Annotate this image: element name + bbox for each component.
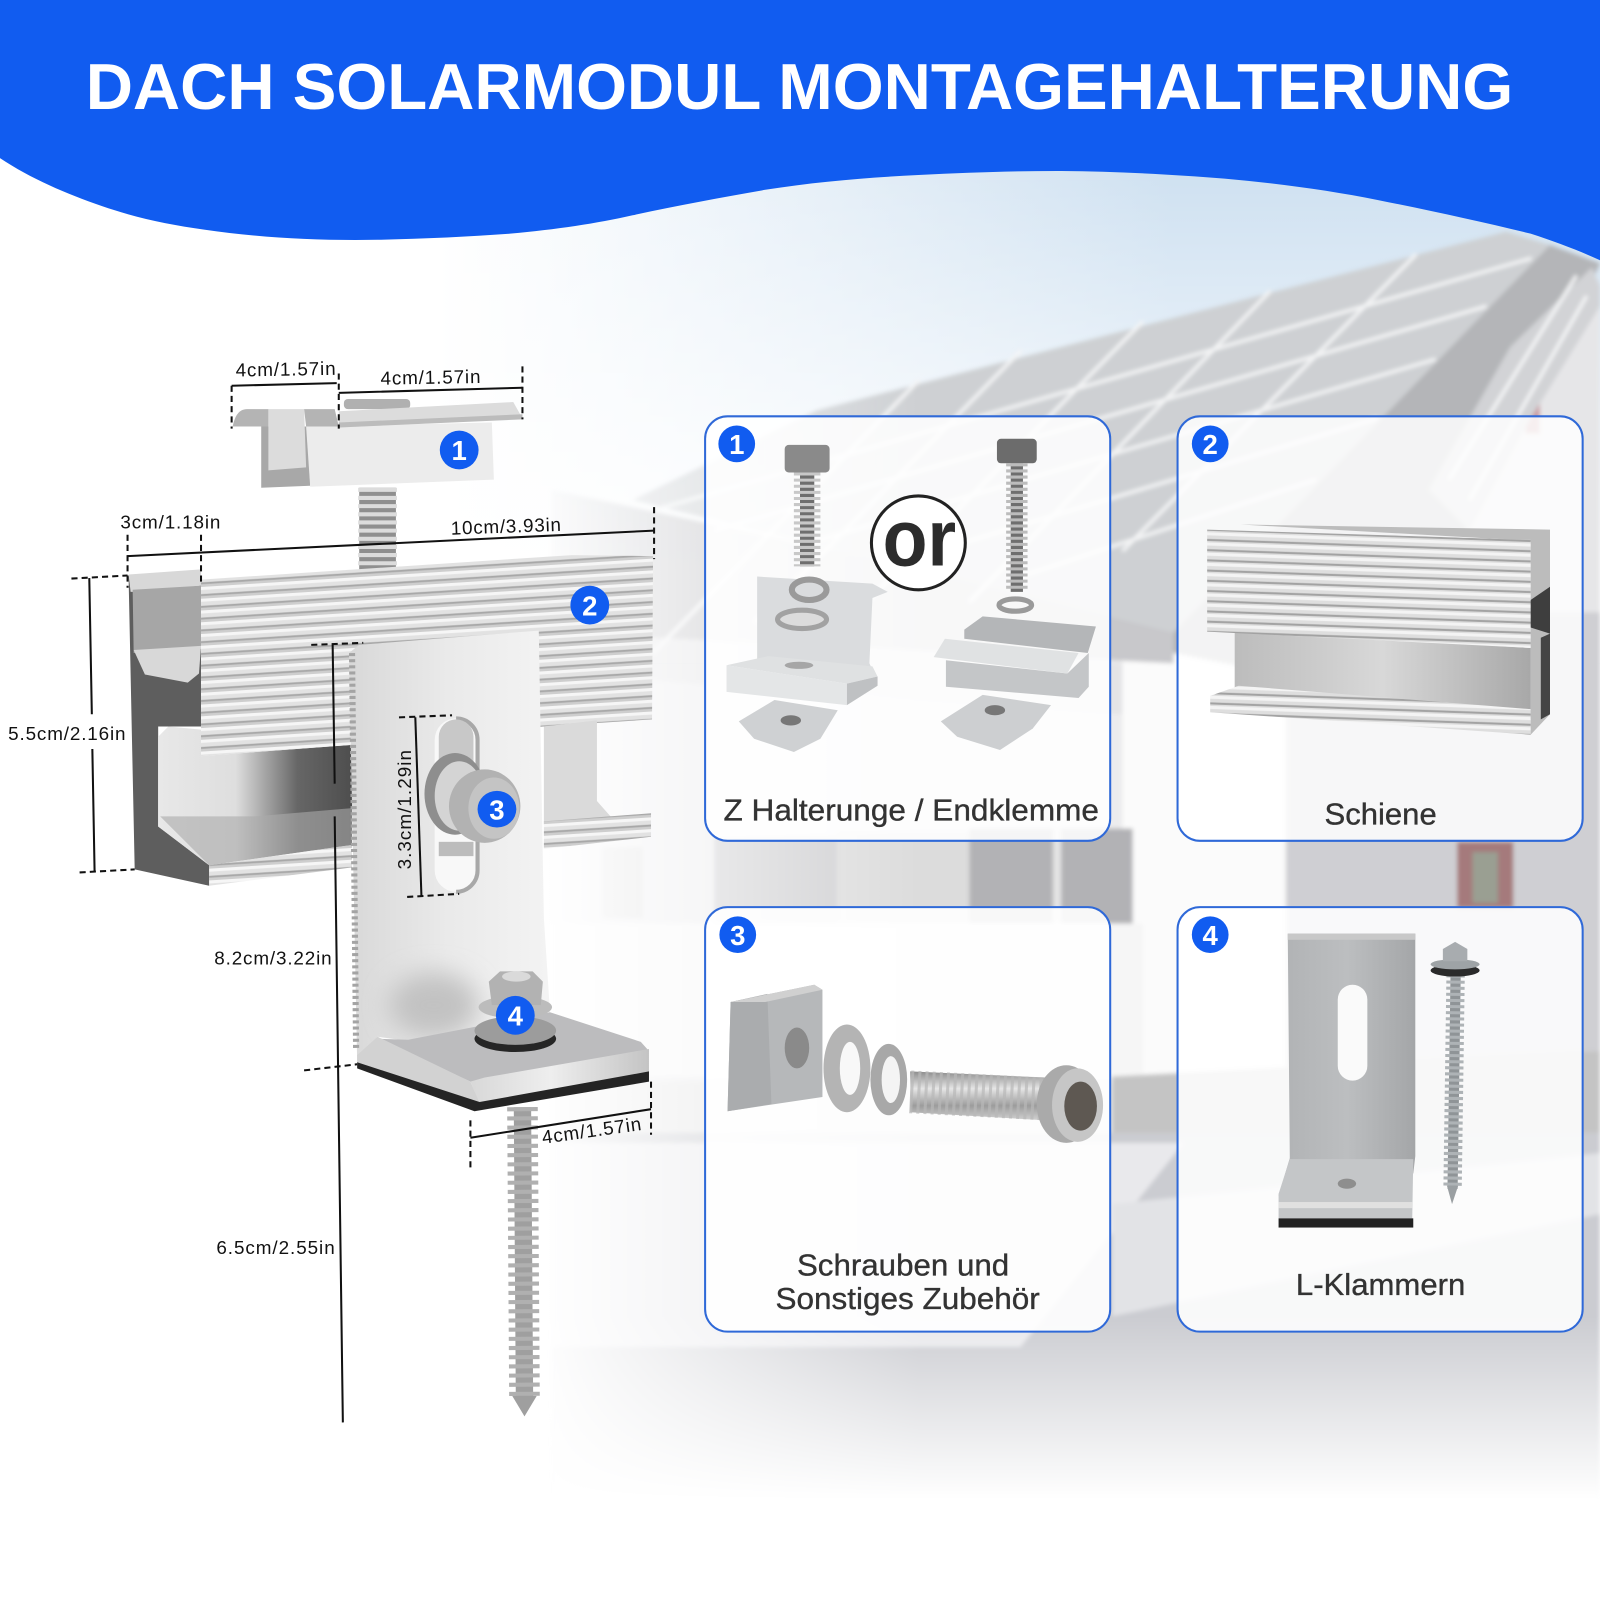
caption: Schiene bbox=[1324, 797, 1437, 831]
caption: Z Halterunge / Endklemme bbox=[723, 793, 1099, 827]
panel 3: Schrauben und Sonstiges Zubehör bbox=[705, 907, 1110, 1332]
dimension labels: 8.2cm/3.22in bbox=[214, 947, 332, 968]
caption bbox=[776, 1249, 1040, 1316]
dimension labels bbox=[8, 358, 642, 1258]
caption: Sonstiges Zubehör bbox=[776, 1282, 1040, 1316]
T-nut A bbox=[739, 700, 838, 752]
badge 2 bbox=[1192, 426, 1229, 462]
main callout 3 bbox=[478, 791, 516, 828]
L bracket bbox=[1279, 934, 1415, 1228]
badge 3: 3 bbox=[730, 920, 745, 951]
main callout 2: 2 bbox=[582, 590, 597, 621]
main callout 4: 4 bbox=[508, 1001, 524, 1032]
main callout 3: 3 bbox=[489, 794, 505, 825]
dimension labels: 5.5cm/2.16in bbox=[8, 723, 126, 744]
fixing screw bbox=[474, 971, 556, 1416]
badge 4 bbox=[1192, 916, 1229, 953]
main assembly product drawing bbox=[129, 399, 653, 1416]
clamp 1 bbox=[233, 399, 522, 488]
end clamp bbox=[934, 616, 1096, 698]
panel 4: L-Klammern bbox=[1178, 907, 1583, 1332]
caption: L-Klammern bbox=[1296, 1268, 1465, 1302]
rail profile bbox=[1207, 524, 1550, 735]
main callout 1: 1 bbox=[452, 435, 467, 466]
main callout 4 bbox=[496, 996, 535, 1035]
dimension labels: 3cm/1.18in bbox=[120, 512, 220, 533]
dimension labels: 4cm/1.57in bbox=[380, 366, 481, 389]
socket screw bbox=[910, 1065, 1103, 1143]
panel 1: Z Halterunge / Endklemme bbox=[705, 416, 1110, 841]
badge 4: 4 bbox=[1203, 920, 1219, 951]
main callout 2 bbox=[570, 586, 609, 624]
dimension lines bbox=[71, 366, 654, 1422]
T-bolt on slot bbox=[424, 753, 520, 843]
or circle: or bbox=[883, 493, 956, 582]
L bracket bbox=[349, 631, 649, 1111]
screw bbox=[1431, 942, 1480, 1204]
dimension labels: 6.5cm/2.55in bbox=[216, 1237, 335, 1258]
screw A bbox=[785, 445, 830, 566]
title: DACH SOLARMODUL MONTAGEHALTERUNG bbox=[86, 50, 1513, 123]
caption: Schrauben und bbox=[797, 1249, 1009, 1283]
dimension labels: 10cm/3.93in bbox=[450, 514, 561, 539]
dimension labels: 4cm/1.57in bbox=[540, 1113, 642, 1148]
panel 2: Schiene bbox=[1178, 416, 1583, 841]
T-nut B bbox=[941, 695, 1051, 750]
T-nut bbox=[728, 985, 822, 1111]
screw B bbox=[997, 439, 1037, 611]
badge 1 bbox=[718, 426, 755, 462]
background: house with solar roof bbox=[551, 232, 1600, 1510]
flat washer bbox=[823, 1024, 870, 1112]
badge 1: 1 bbox=[729, 429, 744, 460]
main callout 1 bbox=[440, 431, 479, 469]
rail bbox=[129, 555, 653, 886]
Z bracket bbox=[727, 577, 888, 705]
spring washer bbox=[870, 1044, 907, 1115]
clamp bolt bbox=[359, 488, 396, 571]
dimension labels: 3.3cm/1.29in bbox=[394, 750, 415, 869]
badge 3 bbox=[719, 916, 756, 953]
badge 2: 2 bbox=[1203, 429, 1218, 460]
header band bbox=[0, 0, 1600, 260]
dimension labels: 4cm/1.57in bbox=[235, 358, 336, 381]
